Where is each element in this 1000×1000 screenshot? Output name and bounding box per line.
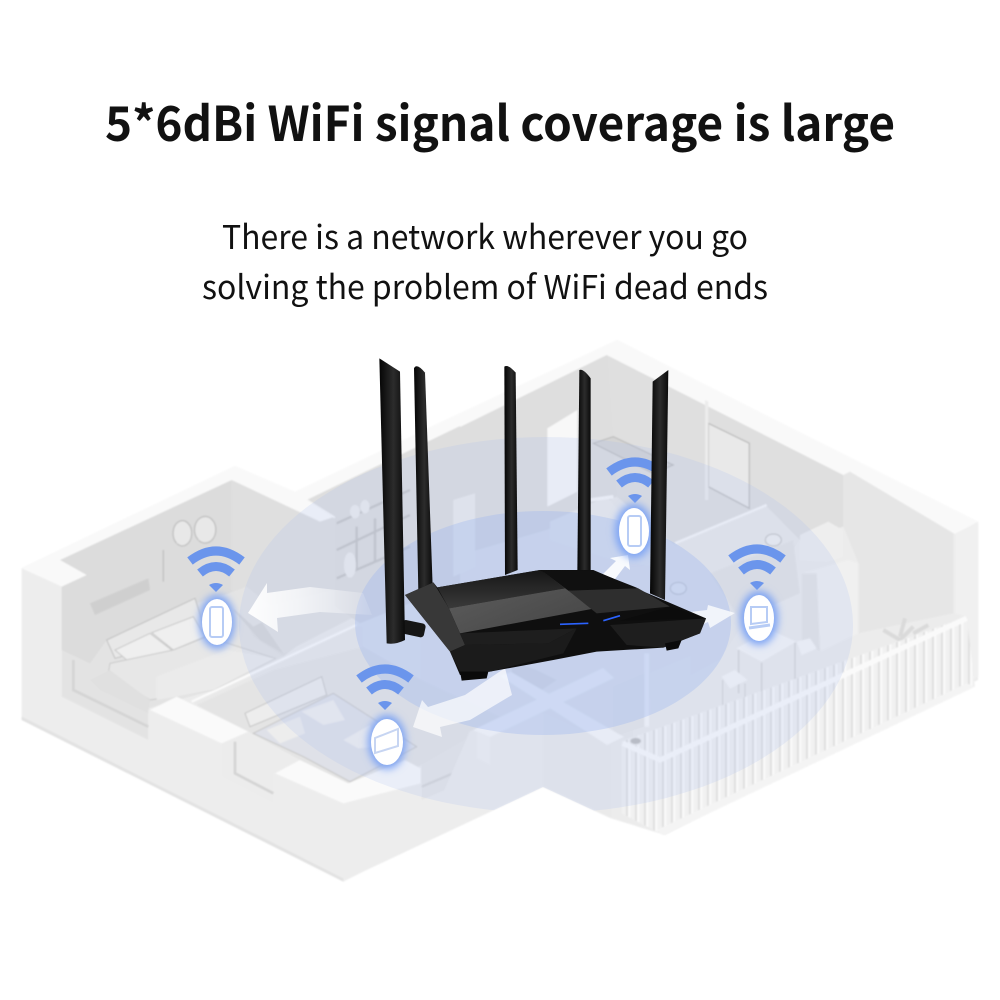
left wing rooms (22, 413, 543, 882)
left bedroom floor (60, 480, 337, 740)
left bedroom back wall (60, 480, 232, 663)
partition wall (550, 497, 660, 567)
device badge: phone left bedroom (199, 595, 235, 649)
sink counter (710, 540, 800, 620)
antenna hinge (400, 619, 426, 638)
antenna 1 (379, 358, 405, 644)
subtitle (202, 211, 768, 309)
skirt left (450, 628, 577, 672)
plant on balcony (883, 618, 928, 640)
outer signal ellipse (239, 437, 853, 813)
right top dark (541, 570, 638, 591)
top recess (437, 570, 565, 608)
balcony railing (622, 617, 975, 835)
right outer wall (955, 522, 978, 683)
device badge: laptop right room (740, 591, 778, 645)
antenna 3 (504, 366, 518, 575)
arrow: to right room (690, 605, 735, 630)
antenna 2 (414, 366, 433, 592)
device badge: monitor lower bedroom (368, 715, 406, 769)
doorway (547, 410, 577, 507)
left outer wall face (22, 568, 543, 882)
left bedroom side wall (232, 480, 335, 657)
centre wall cross (343, 668, 624, 881)
wifi coverage (239, 437, 853, 813)
grey top panel (449, 570, 595, 633)
second bedroom floor (197, 647, 500, 803)
router body (405, 570, 706, 681)
left wedge (405, 582, 465, 652)
LED lights (560, 621, 588, 627)
front panel left (460, 628, 577, 645)
wall box and column (800, 522, 843, 562)
long wall top (295, 413, 460, 500)
arrow: to lower bedroom (413, 668, 512, 737)
living room floor items (510, 660, 557, 693)
feet (460, 672, 488, 681)
wall blocks (150, 697, 248, 743)
bed frame under bed one (90, 670, 150, 713)
subtitle: solving the problem of WiFi dead ends (202, 261, 768, 309)
device badge: phone upper room (615, 504, 653, 558)
shelf unit (593, 437, 673, 473)
wifi icon: upper room (609, 462, 661, 503)
building base (22, 340, 978, 881)
router (379, 358, 706, 681)
inner signal ellipse (355, 511, 731, 735)
bed one (107, 598, 275, 700)
bathroom mirror (708, 423, 749, 508)
lower right niche (422, 733, 500, 800)
wall shelf decor (90, 578, 150, 615)
outer wall top (420, 340, 978, 534)
wifi icon: left bedroom (190, 551, 242, 592)
wall niches (73, 660, 148, 727)
isometric apartment floor plan (22, 340, 978, 882)
bed two (253, 693, 417, 782)
arrow: to left bedroom (248, 583, 372, 632)
right wing rooms (420, 340, 978, 835)
outer wall top (22, 466, 335, 587)
front panel right (610, 618, 706, 648)
arrow: to upper room (602, 555, 630, 583)
subtitle: There is a network wherever you go (222, 211, 748, 259)
title: 5*6dBi WiFi signal coverage is large (105, 85, 895, 155)
main back walls (420, 355, 953, 787)
table and stools (722, 630, 817, 713)
wifi icon: right room (731, 549, 783, 590)
wifi icon: lower bedroom (359, 669, 411, 710)
bolster (245, 677, 327, 727)
antenna 5 (650, 370, 668, 600)
antenna 4 (577, 370, 591, 573)
room divider (192, 625, 363, 713)
shelving wall (295, 426, 475, 623)
nightstand (233, 597, 283, 653)
